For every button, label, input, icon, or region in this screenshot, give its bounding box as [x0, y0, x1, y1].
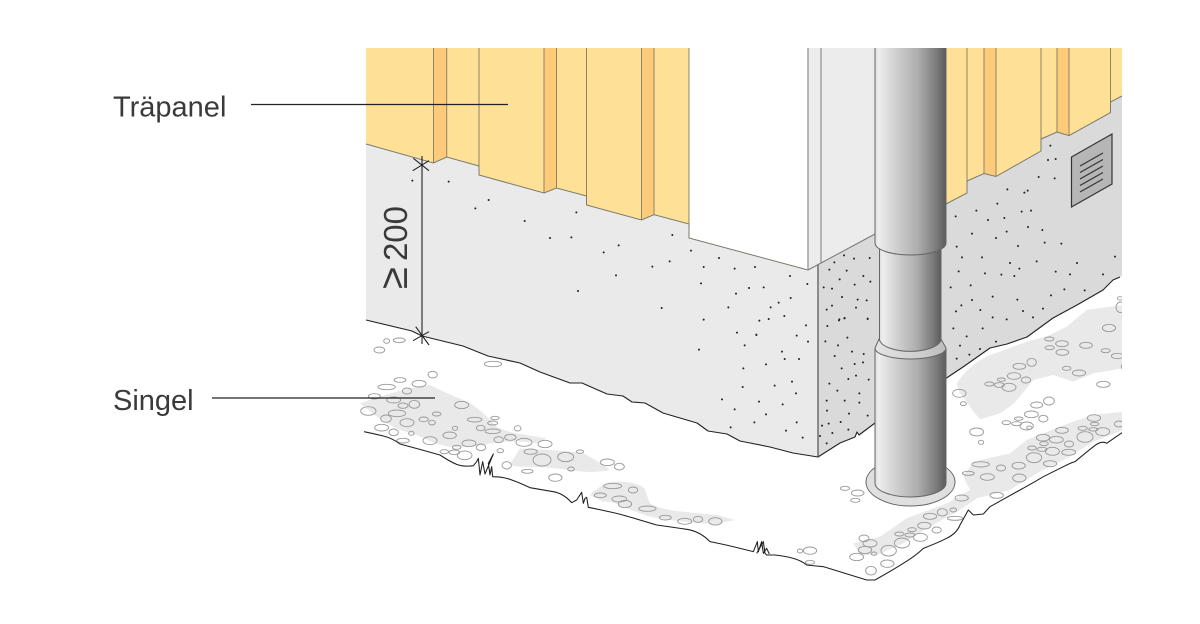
pipe upper section: [875, 48, 946, 255]
pipe lower socket: [875, 348, 946, 497]
foundation corner line: [817, 264, 819, 457]
gravel stones: left: [361, 338, 722, 525]
pipe middle section: [880, 245, 941, 351]
ventilation grille: [1072, 134, 1112, 207]
front edge of ground: left: [364, 432, 769, 554]
concrete speckles: right wall: [820, 146, 1115, 443]
leader line: Singel: [212, 397, 435, 399]
wood panel: right facade: [946, 48, 1122, 204]
gravel patches: right: [853, 305, 1123, 555]
pipe base ring: [866, 458, 955, 506]
gravel ground: [360, 297, 1127, 575]
foundation: left wall: [366, 130, 818, 457]
pipe socket collar: [875, 339, 946, 359]
concrete speckles: left wall: [412, 181, 808, 438]
foundation: right wall: [818, 90, 1122, 457]
white corner board: [808, 48, 875, 270]
label: Träpanel: Träpanel: [113, 92, 226, 124]
label: Singel: Singel: [113, 385, 194, 417]
leader line: Träpanel: [251, 104, 508, 106]
gravel patches: left: [360, 385, 735, 524]
downpipe: [866, 48, 955, 506]
dimension line with end ticks: [413, 156, 429, 345]
wood panel: left facade: [366, 48, 808, 270]
front edge of ground: right: [757, 433, 1122, 580]
foundation ground line: [366, 277, 1120, 457]
dimension label: at least 200: ≥200: [372, 206, 416, 289]
gravel stones: right: [797, 297, 1127, 575]
